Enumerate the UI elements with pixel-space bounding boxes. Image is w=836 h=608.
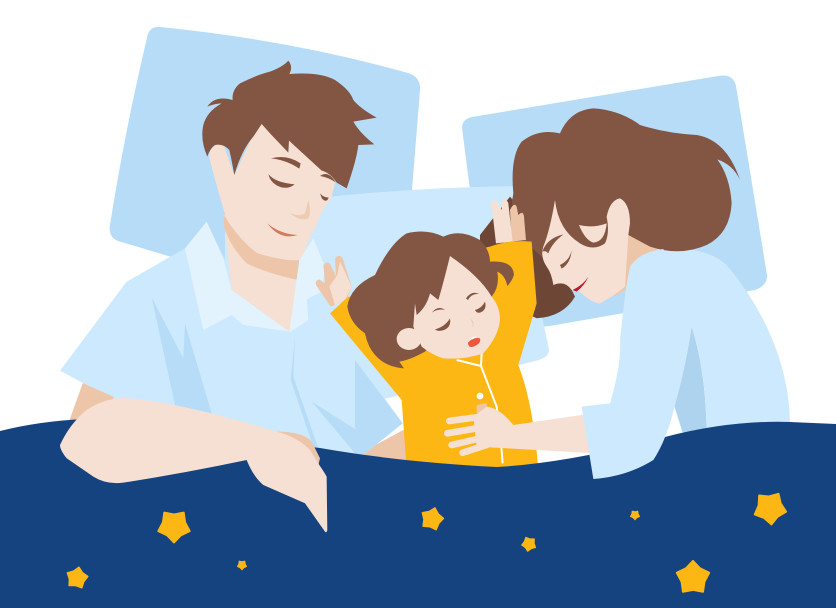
- blanket: [0, 419, 836, 608]
- child: yellow pajamas: [330, 241, 538, 470]
- mother: closed hair gap: [579, 223, 607, 243]
- mother: hand: [447, 403, 593, 453]
- father: hair: [202, 61, 377, 188]
- mother: back of shirt: [627, 248, 790, 440]
- mother: neck: [613, 233, 660, 297]
- child: mouth: [468, 338, 480, 347]
- father: forearm: [60, 398, 327, 532]
- child: [316, 200, 538, 470]
- child: left hand: [316, 256, 352, 307]
- child: pajama seam: [457, 353, 503, 463]
- mother: front of shoulder: [620, 249, 692, 357]
- mother: face: [542, 198, 630, 303]
- father: arm and hand: [60, 398, 327, 532]
- father: nose: [290, 200, 310, 219]
- mother: eye: [560, 250, 572, 269]
- child: hair: [347, 231, 514, 368]
- child: ear: [397, 328, 421, 350]
- mother: arm and hand: [447, 403, 593, 453]
- father: upper arm: [68, 382, 117, 423]
- father: neck: [223, 215, 307, 332]
- mother: back hair: [480, 197, 575, 318]
- stars: [65, 493, 787, 592]
- star: [521, 537, 537, 553]
- mother: eyebrow: [542, 234, 563, 253]
- father: thumb: [277, 432, 320, 473]
- child: nose: [469, 318, 474, 327]
- mother: sleeve: [582, 280, 692, 479]
- star: [158, 513, 190, 542]
- father: mouth: [267, 223, 298, 236]
- child: right hand: [491, 200, 526, 243]
- mother: head: [512, 108, 740, 303]
- father: collar: [185, 222, 289, 332]
- star: [65, 565, 89, 589]
- father: far forearm: [360, 430, 420, 470]
- star: [237, 561, 247, 570]
- pillow: father: [110, 27, 420, 258]
- pillow: child: [300, 186, 549, 400]
- child: face: [413, 256, 500, 359]
- father: shirt shadows: [152, 216, 403, 455]
- mother: lips: [573, 277, 588, 292]
- star: [419, 505, 446, 531]
- father: face: [209, 117, 337, 260]
- star: [753, 493, 787, 526]
- father: shirt: [60, 222, 403, 473]
- father: head: [202, 61, 377, 260]
- child: button: [477, 393, 483, 399]
- father: eyebrows: [271, 157, 336, 182]
- pillow: mother: [462, 75, 767, 330]
- child: eyes and brows: [432, 293, 486, 331]
- star: [677, 561, 709, 592]
- mother: hair: [512, 108, 740, 257]
- star: [630, 511, 640, 520]
- father: body: [60, 215, 420, 473]
- father: eyes: [268, 174, 329, 201]
